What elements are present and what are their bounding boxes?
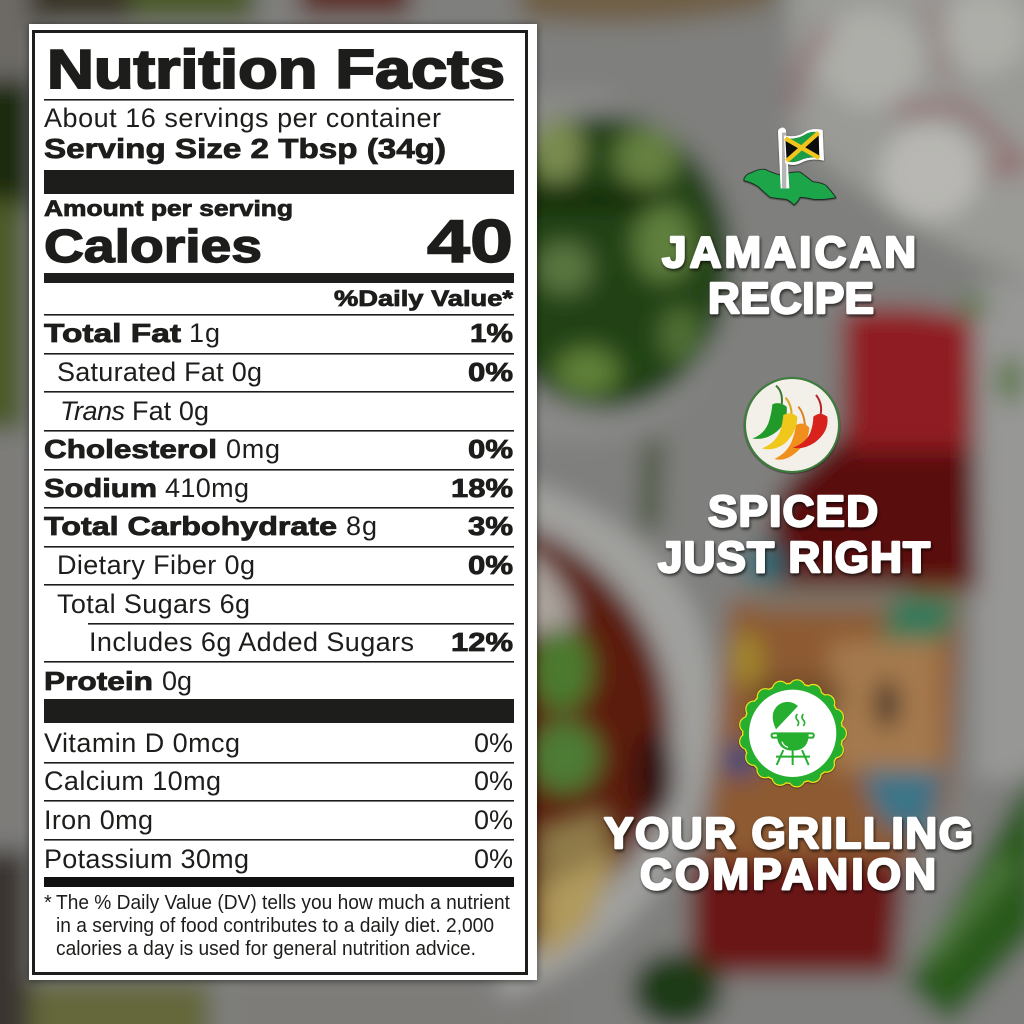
row: sodium: 18% xyxy=(451,473,513,503)
calories xyxy=(44,208,513,275)
heading: Jamaican Recipe: RECIPE xyxy=(708,274,874,323)
row: trans fat xyxy=(60,396,209,426)
row: dietary fiber: 0% xyxy=(468,550,513,580)
row: total fat: 1g xyxy=(189,318,220,348)
row: dietary fiber xyxy=(57,550,513,580)
green bowl xyxy=(500,90,735,442)
row: added sugars: Includes 6g Added Sugars xyxy=(89,627,414,657)
footnote xyxy=(44,892,510,960)
row: vitamin d: Vitamin D 0mcg xyxy=(44,728,240,758)
row: cholesterol xyxy=(44,434,513,464)
row: total fat: Total Fat xyxy=(44,318,181,348)
row: saturated fat: 0% xyxy=(468,357,513,387)
row: total carbohydrate: 8g xyxy=(346,511,377,541)
icon: grill badge xyxy=(742,683,843,784)
row: vitamin d: 0% xyxy=(474,728,513,758)
row: total carbohydrate xyxy=(44,511,513,541)
row: total sugars: Total Sugars 6g xyxy=(57,589,250,619)
row: trans fat: Fat 0g xyxy=(132,396,209,426)
lower plate xyxy=(500,475,715,1000)
heading: Spiced Just Right: SPICED xyxy=(708,487,878,536)
row: cholesterol: 0% xyxy=(468,434,513,464)
radish plate xyxy=(790,0,1024,290)
heading: Your Grilling Companion: YOUR GRILLING xyxy=(604,809,973,858)
row: cholesterol: Cholesterol xyxy=(44,434,217,464)
row: calcium xyxy=(44,766,513,796)
row: total fat: 1% xyxy=(470,318,513,348)
row: saturated fat xyxy=(57,357,513,387)
row: sodium xyxy=(44,473,513,503)
row: protein: Protein xyxy=(44,666,153,696)
heading: Nutrition Facts: Nutrition Facts xyxy=(47,38,505,100)
row: added sugars: 12% xyxy=(451,627,513,657)
icon: chili peppers badge xyxy=(745,378,839,472)
row: potassium: Potassium 30mg xyxy=(44,844,249,874)
footnote: The % Daily Value (DV) tells you how much a nutrient xyxy=(56,892,510,914)
amount per serving: Amount per serving xyxy=(44,196,293,221)
icon: Jamaican flag on island xyxy=(744,127,836,205)
footnote: * xyxy=(44,892,52,914)
panel: nutrition facts label xyxy=(29,24,537,980)
row: cholesterol: 0mg xyxy=(226,434,280,464)
row: potassium xyxy=(44,844,513,874)
heading: Jamaican Recipe: JAMAICAN xyxy=(662,228,916,277)
row: dietary fiber: Dietary Fiber 0g xyxy=(57,550,255,580)
heading: Your Grilling Companion: COMPANION xyxy=(640,850,936,899)
calories: Calories xyxy=(44,220,262,272)
row: vitamin d xyxy=(44,728,513,758)
row: sodium: Sodium xyxy=(44,473,157,503)
row: calcium: Calcium 10mg xyxy=(44,766,221,796)
row: calcium: 0% xyxy=(474,766,513,796)
row: sodium: 410mg xyxy=(165,473,249,503)
serving size: Serving Size 2 Tbsp (34g) xyxy=(44,133,446,164)
heading: Your Grilling Companion xyxy=(604,809,973,899)
calories: 40 xyxy=(427,208,513,275)
row: iron xyxy=(44,805,513,835)
row: protein xyxy=(44,666,192,696)
jalapeno xyxy=(905,760,1024,1024)
row: total carbohydrate: 3% xyxy=(468,511,513,541)
heading: Spiced Just Right: JUST RIGHT xyxy=(658,533,930,582)
heading: Jamaican Recipe xyxy=(662,228,916,323)
row: iron: 0% xyxy=(474,805,513,835)
row: total fat xyxy=(44,318,513,348)
daily value header: %Daily Value* xyxy=(334,286,514,311)
footnote: in a serving of food contributes to a daily diet. 2,000 xyxy=(56,915,494,937)
row: iron: Iron 0mg xyxy=(44,805,153,835)
row: saturated fat: Saturated Fat 0g xyxy=(57,357,262,387)
row: trans fat: Trans xyxy=(60,396,125,426)
servings per container: About 16 servings per container xyxy=(44,103,441,133)
row: total carbohydrate: Total Carbohydrate xyxy=(44,511,337,541)
bottle xyxy=(768,308,978,590)
heading: Spiced Just Right xyxy=(658,487,930,582)
row: potassium: 0% xyxy=(474,844,513,874)
row: protein: 0g xyxy=(162,666,192,696)
footnote: calories a day is used for general nutrition advice. xyxy=(56,938,476,960)
